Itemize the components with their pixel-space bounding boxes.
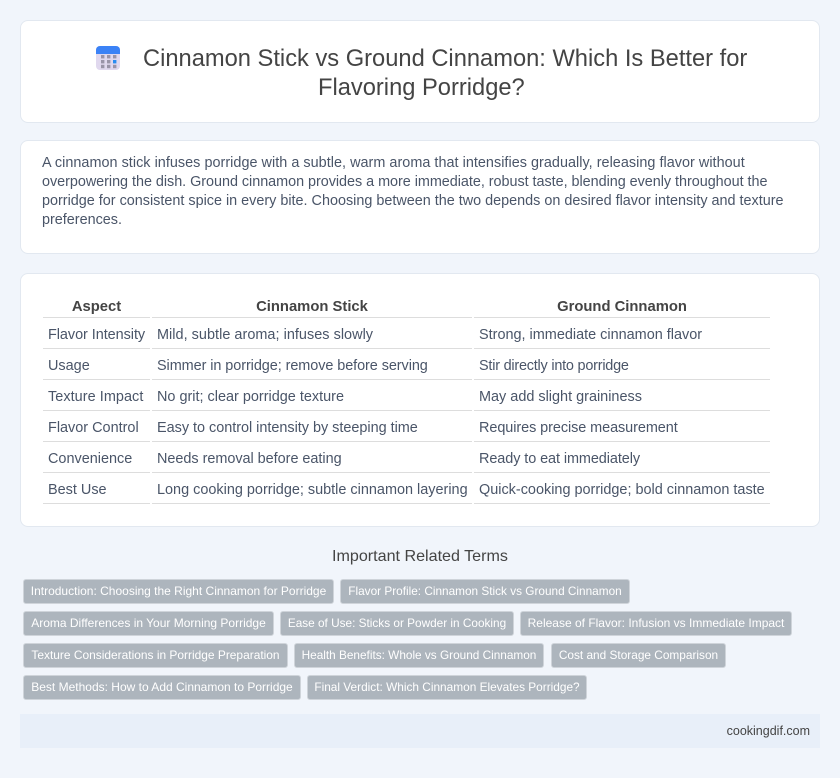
- row: best use: [48, 482, 765, 498]
- row: best use: Quick-cooking porridge; bold cinnamon taste: [479, 482, 765, 498]
- panel: introduction text: [20, 140, 820, 254]
- table header: Aspect: [72, 299, 121, 315]
- text block: introduction: overpowering the dish. Ground cinnamon provides a more immediate, robust taste, blending evenly throughout the: [42, 174, 767, 190]
- tag: Introduction: Choosing the Right Cinnamon for Porridge: [31, 584, 326, 598]
- footer source text: cookingdif.com: [727, 724, 810, 738]
- row: usage: [48, 358, 629, 374]
- row: flavor intensity: [48, 327, 702, 343]
- tag: Health Benefits: Whole vs Ground Cinnamon: [302, 648, 536, 662]
- text block: introduction: A cinnamon stick infuses porridge with a subtle, warm aroma that intensifies gradually, releasing flavor without: [42, 155, 745, 171]
- tag: [520, 611, 792, 636]
- tag: [551, 643, 726, 668]
- row: convenience: [48, 451, 640, 467]
- row: best use: Best Use: [48, 482, 107, 498]
- table header: Cinnamon Stick: [256, 299, 368, 315]
- text block: introduction: porridge for consistent spice in every bite. Choosing between the two depends on desired flavor intensity and texture: [42, 193, 784, 209]
- text block: introduction: [42, 155, 784, 228]
- tag: Aroma Differences in Your Morning Porridge: [31, 616, 266, 630]
- text block: introduction: preferences.: [42, 212, 122, 228]
- tag: Best Methods: How to Add Cinnamon to Porridge: [31, 680, 293, 694]
- row: flavor intensity: Mild, subtle aroma; infuses slowly: [157, 327, 373, 343]
- tag: Ease of Use: Sticks or Powder in Cooking: [288, 616, 506, 630]
- tag: Final Verdict: Which Cinnamon Elevates Porridge?: [314, 680, 580, 694]
- title: Cinnamon Stick vs Ground Cinnamon: Which Is Better for: [143, 46, 747, 72]
- title: Flavoring Porridge?: [318, 75, 525, 101]
- comparison table: [43, 299, 770, 504]
- row: texture impact: Texture Impact: [48, 389, 143, 405]
- row: usage: Usage: [48, 358, 90, 374]
- row: usage: Stir directly into porridge: [479, 358, 629, 374]
- icon: calendar: [96, 46, 120, 70]
- panel: comparison table: [20, 273, 820, 527]
- row: flavor intensity: Flavor Intensity: [48, 327, 145, 343]
- row: convenience: Ready to eat immediately: [479, 451, 640, 467]
- related term tags: [23, 579, 792, 700]
- table header: [72, 299, 687, 315]
- row: texture impact: May add slight graininess: [479, 389, 642, 405]
- heading: important related terms: Important Related Terms: [332, 547, 508, 565]
- tag: [340, 579, 630, 604]
- tag: [23, 643, 288, 668]
- footer bar: [20, 714, 820, 748]
- row: texture impact: No grit; clear porridge texture: [157, 389, 344, 405]
- row: usage: Simmer in porridge; remove before serving: [157, 358, 428, 374]
- row: flavor control: Easy to control intensity by steeping time: [157, 420, 418, 436]
- row: texture impact: [48, 389, 642, 405]
- tag: Flavor Profile: Cinnamon Stick vs Ground Cinnamon: [348, 584, 622, 598]
- tag: [307, 675, 587, 700]
- tag: Cost and Storage Comparison: [559, 648, 718, 662]
- row: flavor control: [48, 420, 678, 436]
- row: flavor control: Requires precise measurement: [479, 420, 678, 436]
- row: convenience: Needs removal before eating: [157, 451, 342, 467]
- row: convenience: Convenience: [48, 451, 132, 467]
- tag: [23, 675, 301, 700]
- row: flavor intensity: Strong, immediate cinnamon flavor: [479, 327, 702, 343]
- title: [143, 46, 747, 101]
- tag: [23, 579, 334, 604]
- tag: [23, 611, 274, 636]
- panel: title header: [20, 20, 820, 123]
- row: best use: Long cooking porridge; subtle cinnamon layering: [157, 482, 468, 498]
- table header: Ground Cinnamon: [557, 299, 687, 315]
- tag: Texture Considerations in Porridge Preparation: [31, 648, 280, 662]
- tag: [294, 643, 544, 668]
- tag: Release of Flavor: Infusion vs Immediate Impact: [528, 616, 784, 630]
- row: flavor control: Flavor Control: [48, 420, 139, 436]
- tag: [280, 611, 514, 636]
